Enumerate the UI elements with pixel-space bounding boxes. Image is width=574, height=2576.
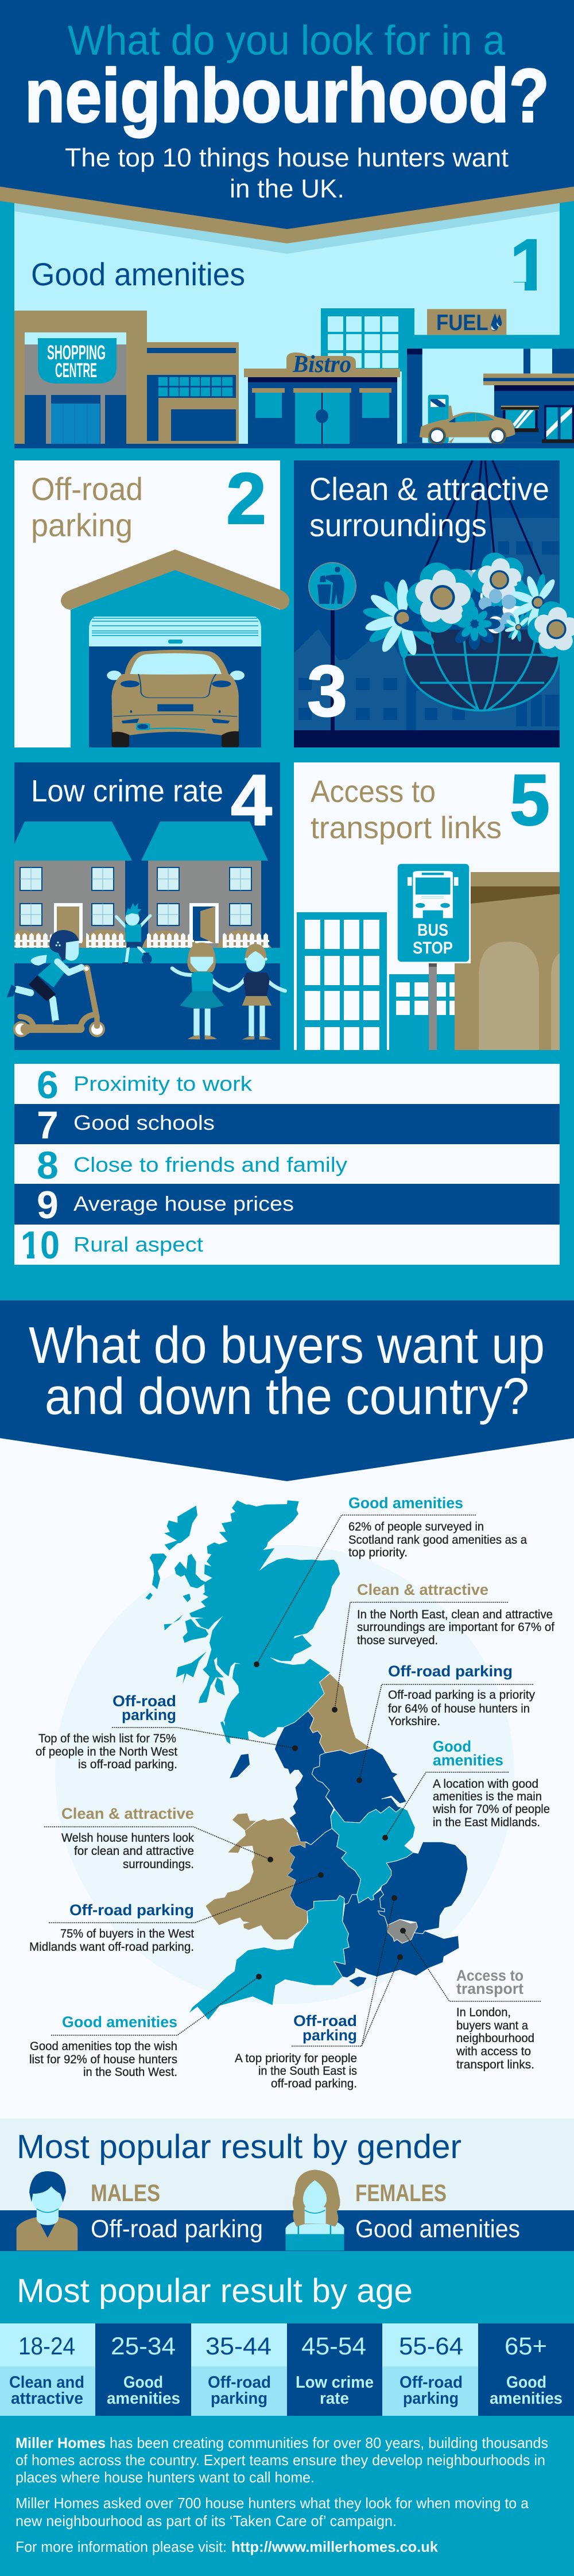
age column 45-54: Low crime: [296, 2373, 374, 2392]
small pale flower: [479, 589, 516, 632]
callout: South West good amenities: list for 92% of house hunters: [29, 2053, 177, 2066]
callout: London access to transport: buyers want a: [456, 2019, 528, 2032]
heading: clean and attractive surroundings: [309, 471, 549, 543]
age column 25-34: amenities: [107, 2389, 180, 2408]
map: UK regions: [145, 1500, 468, 2020]
callout: London access to transport: [400, 1928, 541, 2071]
row 9: [14, 1183, 560, 1227]
hanging basket chains: [425, 460, 542, 576]
icon: female figure: [285, 2170, 344, 2250]
shop building: [147, 342, 239, 444]
age column 35-44: [191, 2323, 287, 2416]
row 9: 9: [37, 1183, 59, 1227]
bus stop sign: [397, 863, 470, 1050]
row 6: Proximity to work: [73, 1072, 253, 1095]
subtitle: The top 10 things house hunters want: [65, 143, 509, 172]
icon: male figure: [17, 2171, 77, 2250]
row 7: [14, 1103, 560, 1147]
callout: West Midlands off-road parking: Off-road parking: [69, 1901, 194, 1919]
footer text: http://www.millerhomes.co.uk: [231, 2538, 439, 2555]
callout: South West good amenities: in the South West.: [83, 2066, 177, 2079]
callout: East Midlands good amenities: wish for 70% of people: [432, 1803, 550, 1816]
row 6: [14, 1063, 560, 1107]
result: females good amenities: Good amenities: [355, 2215, 520, 2243]
callout: West Midlands off-road parking: Midlands want off-road parking.: [29, 1940, 194, 1954]
icon: no litter sign: [309, 563, 356, 747]
age column 25-34: 25-34: [111, 2333, 176, 2360]
callout: London access to transport: with access to: [456, 2045, 531, 2058]
Scotland: [145, 1500, 340, 1721]
callout: North East clean and attractive: In the North East, clean and attractive: [357, 1608, 553, 1621]
age column 18-24: [0, 2323, 95, 2416]
age column 45-54: rate: [320, 2389, 349, 2408]
row 10: 10: [21, 1223, 60, 1267]
terraced houses: [14, 822, 280, 963]
callout: Yorkshire off-road parking: Off-road parking is a priority: [388, 1688, 535, 1702]
callout: South East off-road parking: parking: [302, 2027, 357, 2044]
heading: off-road parking: [31, 471, 143, 543]
age column 55-64: Off-road: [400, 2373, 463, 2392]
shopping centre building: CENTRE: [55, 359, 97, 382]
callout: Wales clean and attractive: [44, 1805, 273, 1871]
age column 25-34: [95, 2323, 191, 2416]
heading: by age: Most popular result by age: [17, 2272, 413, 2310]
panel 5: access to transport links: [294, 760, 560, 1050]
office tower: [321, 308, 414, 371]
bistro: Bistro: [292, 351, 351, 378]
subtitle: in the UK.: [230, 174, 344, 203]
age column 45-54: 45-54: [301, 2333, 366, 2360]
row 8: [14, 1144, 560, 1187]
footer text: [15, 2434, 548, 2555]
bus stop sign: STOP: [413, 939, 453, 958]
callout: East Midlands good amenities: A location with good: [433, 1777, 538, 1791]
callout: North East clean and attractive: surroundings are important for 67% of: [357, 1621, 554, 1634]
callout: East Midlands good amenities: amenities is the main: [433, 1790, 542, 1803]
footer text: For more information please visit:: [15, 2538, 227, 2555]
England and Wales: [188, 1674, 468, 2020]
age column 25-34: Good: [123, 2373, 163, 2392]
callout: East Midlands good amenities: Good: [433, 1738, 471, 1755]
age column 55-64: 55-64: [399, 2333, 463, 2360]
footer text: Miller Homes asked over 700 house hunters what they look for when moving to a: [15, 2494, 529, 2512]
callout: West Midlands off-road parking: [29, 1872, 324, 1954]
callout: East Midlands good amenities: in the East Midlands.: [433, 1816, 540, 1829]
heading: clean and attractive surroundings: Clean & attractive: [309, 471, 549, 507]
heading: good amenities: Good amenities: [31, 256, 245, 292]
number 5: 5: [510, 760, 550, 840]
callout: Scotland good amenities: Scotland rank good amenities as a: [348, 1533, 527, 1547]
heading: buyers up and down the country: [29, 1317, 545, 1425]
callout: East Midlands good amenities: [382, 1738, 550, 1841]
child with ball: [117, 903, 152, 964]
heading: low crime rate: Low crime rate: [31, 774, 223, 808]
callout: East Midlands good amenities: amenities: [433, 1752, 503, 1769]
result: males off-road parking: Off-road parking: [91, 2215, 263, 2243]
heading: by gender: Most popular result by gender: [17, 2128, 461, 2166]
callout: South East off-road parking: Off-road: [293, 2012, 357, 2029]
callout: North West off-road parking: Off-road: [113, 1692, 176, 1710]
subtitle: [65, 143, 509, 203]
fuel station: [402, 304, 574, 448]
callout: Yorkshire off-road parking: [356, 1663, 535, 1783]
heading: clean and attractive surroundings: surroundings: [309, 507, 487, 543]
callout: Wales clean and attractive: surroundings.: [123, 1858, 194, 1871]
ranked list 6 to 10: [14, 1063, 560, 1267]
hanging basket with flowers: [362, 553, 574, 711]
footer text: new neighbourhood as part of its ‘Taken Care of’ campaign.: [15, 2512, 397, 2529]
page background: [0, 0, 574, 1301]
shopping centre building: SHOPPING: [47, 342, 106, 364]
number 4: 4: [231, 760, 272, 840]
panel 2: off-road parking: [14, 458, 294, 747]
age column 65+: amenities: [490, 2389, 563, 2408]
callout: North East clean and attractive: Clean & attractive: [357, 1581, 488, 1598]
callout: London access to transport: transport: [456, 1980, 523, 1997]
callout: South East off-road parking: [235, 1895, 403, 2090]
panel: most popular result by age: [0, 2251, 574, 2576]
age column 55-64: parking: [403, 2389, 459, 2408]
row 8: 8: [37, 1144, 59, 1187]
bistro: [244, 351, 400, 444]
label: males: MALES: [91, 2179, 160, 2206]
callout: Wales clean and attractive: for clean and attractive: [74, 1845, 194, 1858]
heading: buyers up and down the country: What do buyers want up: [29, 1317, 545, 1374]
number 2: 2: [226, 458, 266, 539]
age column 45-54: [287, 2323, 382, 2416]
row 10: [14, 1223, 560, 1267]
age column 18-24: 18-24: [18, 2333, 75, 2360]
callout: South East off-road parking: A top priority for people: [235, 2052, 357, 2065]
row 6: 6: [37, 1063, 59, 1107]
footer text: Miller Homes: [15, 2434, 106, 2451]
car rear view: [107, 650, 245, 747]
callout: London access to transport: transport links.: [456, 2058, 534, 2071]
office blocks: [297, 912, 456, 1050]
shopping centre building: [14, 311, 147, 444]
age column 65+: 65+: [505, 2333, 547, 2360]
age column 55-64: [382, 2323, 478, 2416]
age column 35-44: parking: [211, 2389, 267, 2408]
row 9: Average house prices: [73, 1192, 294, 1215]
callout: South West good amenities: Good amenities top the wish: [30, 2040, 177, 2053]
callout: North West off-road parking: of people in the North West: [36, 1745, 177, 1758]
bus stop sign: BUS: [417, 921, 448, 940]
callout: Wales clean and attractive: Clean & attractive: [61, 1805, 194, 1822]
callout: North East clean and attractive: [332, 1581, 554, 1713]
number 3: 3: [307, 650, 347, 731]
label: females: FEMALES: [355, 2179, 447, 2206]
callout: North West off-road parking: is off-road parking.: [78, 1758, 177, 1771]
callout: Yorkshire off-road parking: Yorkshire.: [388, 1715, 440, 1728]
callout: North West off-road parking: [36, 1692, 298, 1771]
age column 65+: [478, 2323, 574, 2416]
icon: bus: [408, 871, 459, 918]
callout: South West good amenities: Good amenities: [62, 2013, 177, 2031]
age column 65+: Good: [506, 2373, 546, 2392]
footer text: places where house hunters want to call home.: [15, 2469, 315, 2486]
panel 4: low crime rate: [7, 760, 285, 1050]
heading: off-road parking: Off-road: [31, 471, 143, 507]
heading: access to transport links: Access to: [311, 774, 436, 809]
title line 1: What do you look for in a: [68, 18, 506, 64]
callout: London access to transport: Access to: [456, 1967, 523, 1984]
faded townscape: [294, 518, 560, 730]
callout: North West off-road parking: Top of the wish list for 75%: [38, 1732, 176, 1745]
garage: [61, 549, 294, 747]
callout: Yorkshire off-road parking: for 64% of house hunters in: [388, 1702, 530, 1715]
number 1: 1: [510, 224, 550, 305]
footer text: of homes across the country. Expert teams ensure they develop neighbourhoods in: [15, 2451, 545, 2469]
footer text: has been creating communities for over 80 years, building thousands: [110, 2434, 548, 2451]
callout: South East off-road parking: off-road parking.: [271, 2077, 357, 2090]
railway station building: [455, 872, 560, 1050]
age column 35-44: Off-road: [208, 2373, 271, 2392]
callout: Scotland good amenities: [254, 1494, 527, 1667]
heading: access to transport links: [311, 774, 502, 845]
row 8: Close to friends and family: [73, 1153, 347, 1176]
heading: off-road parking: parking: [31, 507, 133, 543]
heading: access to transport links: transport links: [311, 811, 502, 845]
callout: Yorkshire off-road parking: Off-road parking: [388, 1663, 513, 1680]
navy flower: [452, 603, 501, 650]
heading: buyers up and down the country: and down the country?: [45, 1368, 529, 1425]
callout: Scotland good amenities: Good amenities: [348, 1494, 463, 1512]
callout: London access to transport: In London,: [456, 2006, 511, 2019]
callout: South East off-road parking: in the South East is: [258, 2064, 357, 2078]
callout: London access to transport: neighbourhood: [456, 2032, 534, 2045]
row 7: Good schools: [73, 1111, 215, 1134]
panel 3: clean and attractive surroundings: [294, 460, 574, 747]
row 10: Rural aspect: [73, 1233, 203, 1256]
panel 1: good amenities: [14, 195, 574, 448]
icon: fuel drops: [491, 313, 502, 331]
callout: West Midlands off-road parking: 75% of buyers in the West: [60, 1927, 194, 1940]
girls holding hands: [172, 943, 285, 1040]
callout: Wales clean and attractive: Welsh house hunters look: [61, 1831, 194, 1845]
fuel sign text: FUEL: [436, 311, 488, 335]
callout: Scotland good amenities: top priority.: [348, 1546, 408, 1559]
boy on scooter: [7, 930, 105, 1037]
age column 18-24: Clean and: [9, 2373, 84, 2392]
callout: Scotland good amenities: 62% of people surveyed in: [348, 1520, 484, 1533]
callout: North West off-road parking: parking: [122, 1706, 176, 1723]
map section background: [0, 1300, 574, 2118]
row 7: 7: [37, 1103, 59, 1147]
panel: most popular result by gender: [0, 2118, 574, 2251]
age column 35-44: 35-44: [205, 2333, 272, 2360]
callout: North East clean and attractive: those surveyed.: [357, 1634, 438, 1647]
age column 18-24: attractive: [11, 2389, 83, 2408]
callout: South West good amenities: [29, 1974, 262, 2079]
header banner: [0, 0, 574, 243]
